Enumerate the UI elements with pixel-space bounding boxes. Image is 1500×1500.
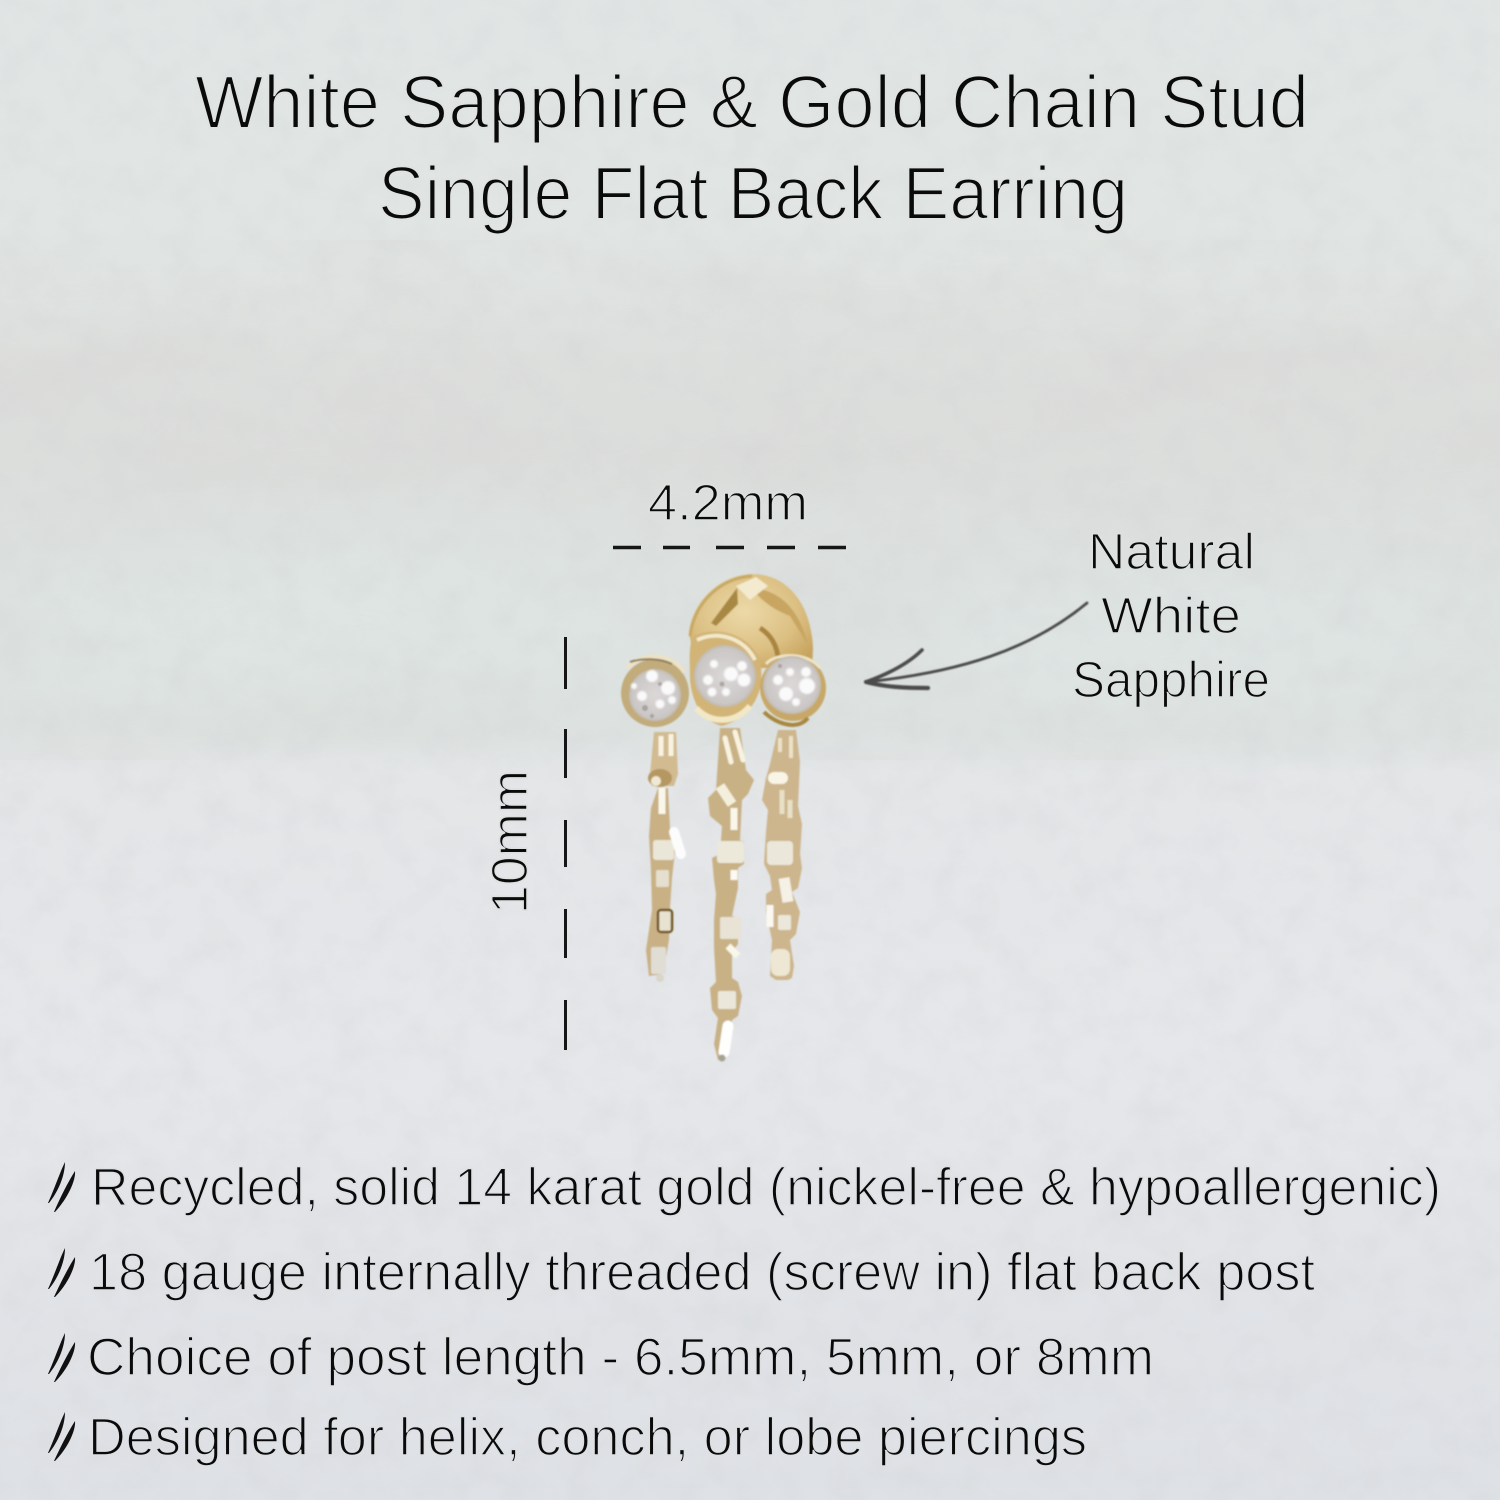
width dimension: 4.2mm: 4.2mm xyxy=(648,474,808,531)
earring: back disc xyxy=(689,574,813,668)
callout label: Natural White Sapphire: Natural xyxy=(1088,523,1255,580)
height dimension: 10mm: 10mm xyxy=(481,770,538,914)
earring: middle chain xyxy=(708,728,754,1062)
callout label: Natural White Sapphire: White xyxy=(1101,587,1241,644)
callout label: Natural White Sapphire: Sapphire xyxy=(1072,651,1270,708)
title: White Sapphire & Gold Chain Stud xyxy=(195,60,1309,144)
bullet 3: Choice of post length - 6.5mm, 5mm, or 8mm xyxy=(87,1328,1154,1387)
callout label: Natural White Sapphire xyxy=(1072,523,1270,708)
earring: right chain xyxy=(762,730,802,980)
feature list xyxy=(48,1158,1441,1467)
earring: left chain xyxy=(646,732,681,982)
arrow: callout to sapphire xyxy=(866,603,1087,688)
title xyxy=(195,60,1309,235)
bullet 4: Designed for helix, conch, or lobe piercings xyxy=(88,1408,1087,1467)
bullet 1: Recycled, solid 14 karat gold (nickel-free & hypoallergenic) xyxy=(91,1158,1441,1217)
earring photo xyxy=(621,574,826,1062)
title: Single Flat Back Earring xyxy=(378,151,1128,235)
earring: three sapphires xyxy=(621,631,826,727)
bullet 2: 18 gauge internally threaded (screw in) flat back post xyxy=(89,1243,1315,1302)
